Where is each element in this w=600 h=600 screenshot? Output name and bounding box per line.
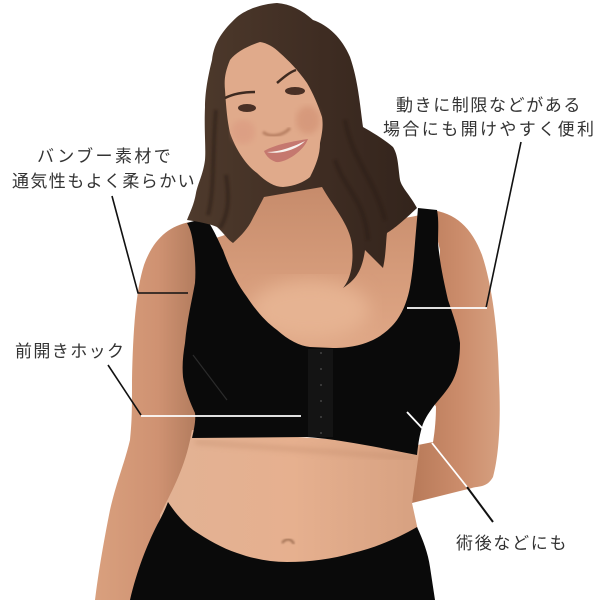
label text: bamboo line 2: 通気性もよく柔らかい bbox=[12, 172, 196, 191]
label text: open line 2: 場合にも開けやすく便利 bbox=[383, 120, 596, 139]
navel bbox=[282, 539, 294, 544]
shorts waistband bbox=[130, 502, 435, 600]
inner seam line bbox=[193, 355, 227, 400]
front hook closure bbox=[308, 349, 333, 437]
nose shadow bbox=[263, 128, 290, 135]
label text: 術後などにも bbox=[456, 534, 568, 553]
left arm bbox=[95, 222, 200, 600]
label text: open line 1: 動きに制限などがある bbox=[396, 96, 582, 115]
shadow under bra bbox=[195, 442, 415, 458]
hair strands bbox=[208, 110, 385, 240]
leader line bbox=[467, 487, 493, 522]
chest highlight bbox=[250, 280, 370, 340]
right cheek shading bbox=[296, 106, 320, 134]
label text: 前開きホック bbox=[15, 342, 125, 361]
lips bbox=[264, 139, 308, 162]
cheek shading bbox=[231, 120, 255, 144]
eye right bbox=[285, 87, 305, 95]
leader line bbox=[108, 365, 141, 415]
eyebrow left bbox=[225, 92, 255, 98]
leader line bbox=[112, 196, 188, 293]
bra bbox=[183, 208, 460, 455]
right arm bbox=[412, 210, 500, 503]
neck and chest bbox=[205, 185, 420, 370]
model photo illustration bbox=[95, 3, 500, 600]
label text: bamboo line 1: バンブー素材で bbox=[37, 146, 173, 166]
hook strip bbox=[320, 352, 322, 434]
callout: front hook bbox=[15, 342, 301, 416]
white gap between torso and arm bbox=[418, 405, 436, 445]
waist bbox=[160, 430, 425, 575]
eyebrow right bbox=[277, 70, 296, 83]
callout: bamboo material bbox=[12, 146, 196, 293]
callout: post-surgery bbox=[407, 412, 568, 553]
teeth bbox=[267, 141, 305, 153]
eye left bbox=[238, 104, 256, 112]
hair bbox=[187, 3, 417, 288]
callout: easy to open bbox=[383, 96, 596, 308]
face bbox=[225, 42, 323, 187]
leader line bbox=[486, 142, 521, 308]
